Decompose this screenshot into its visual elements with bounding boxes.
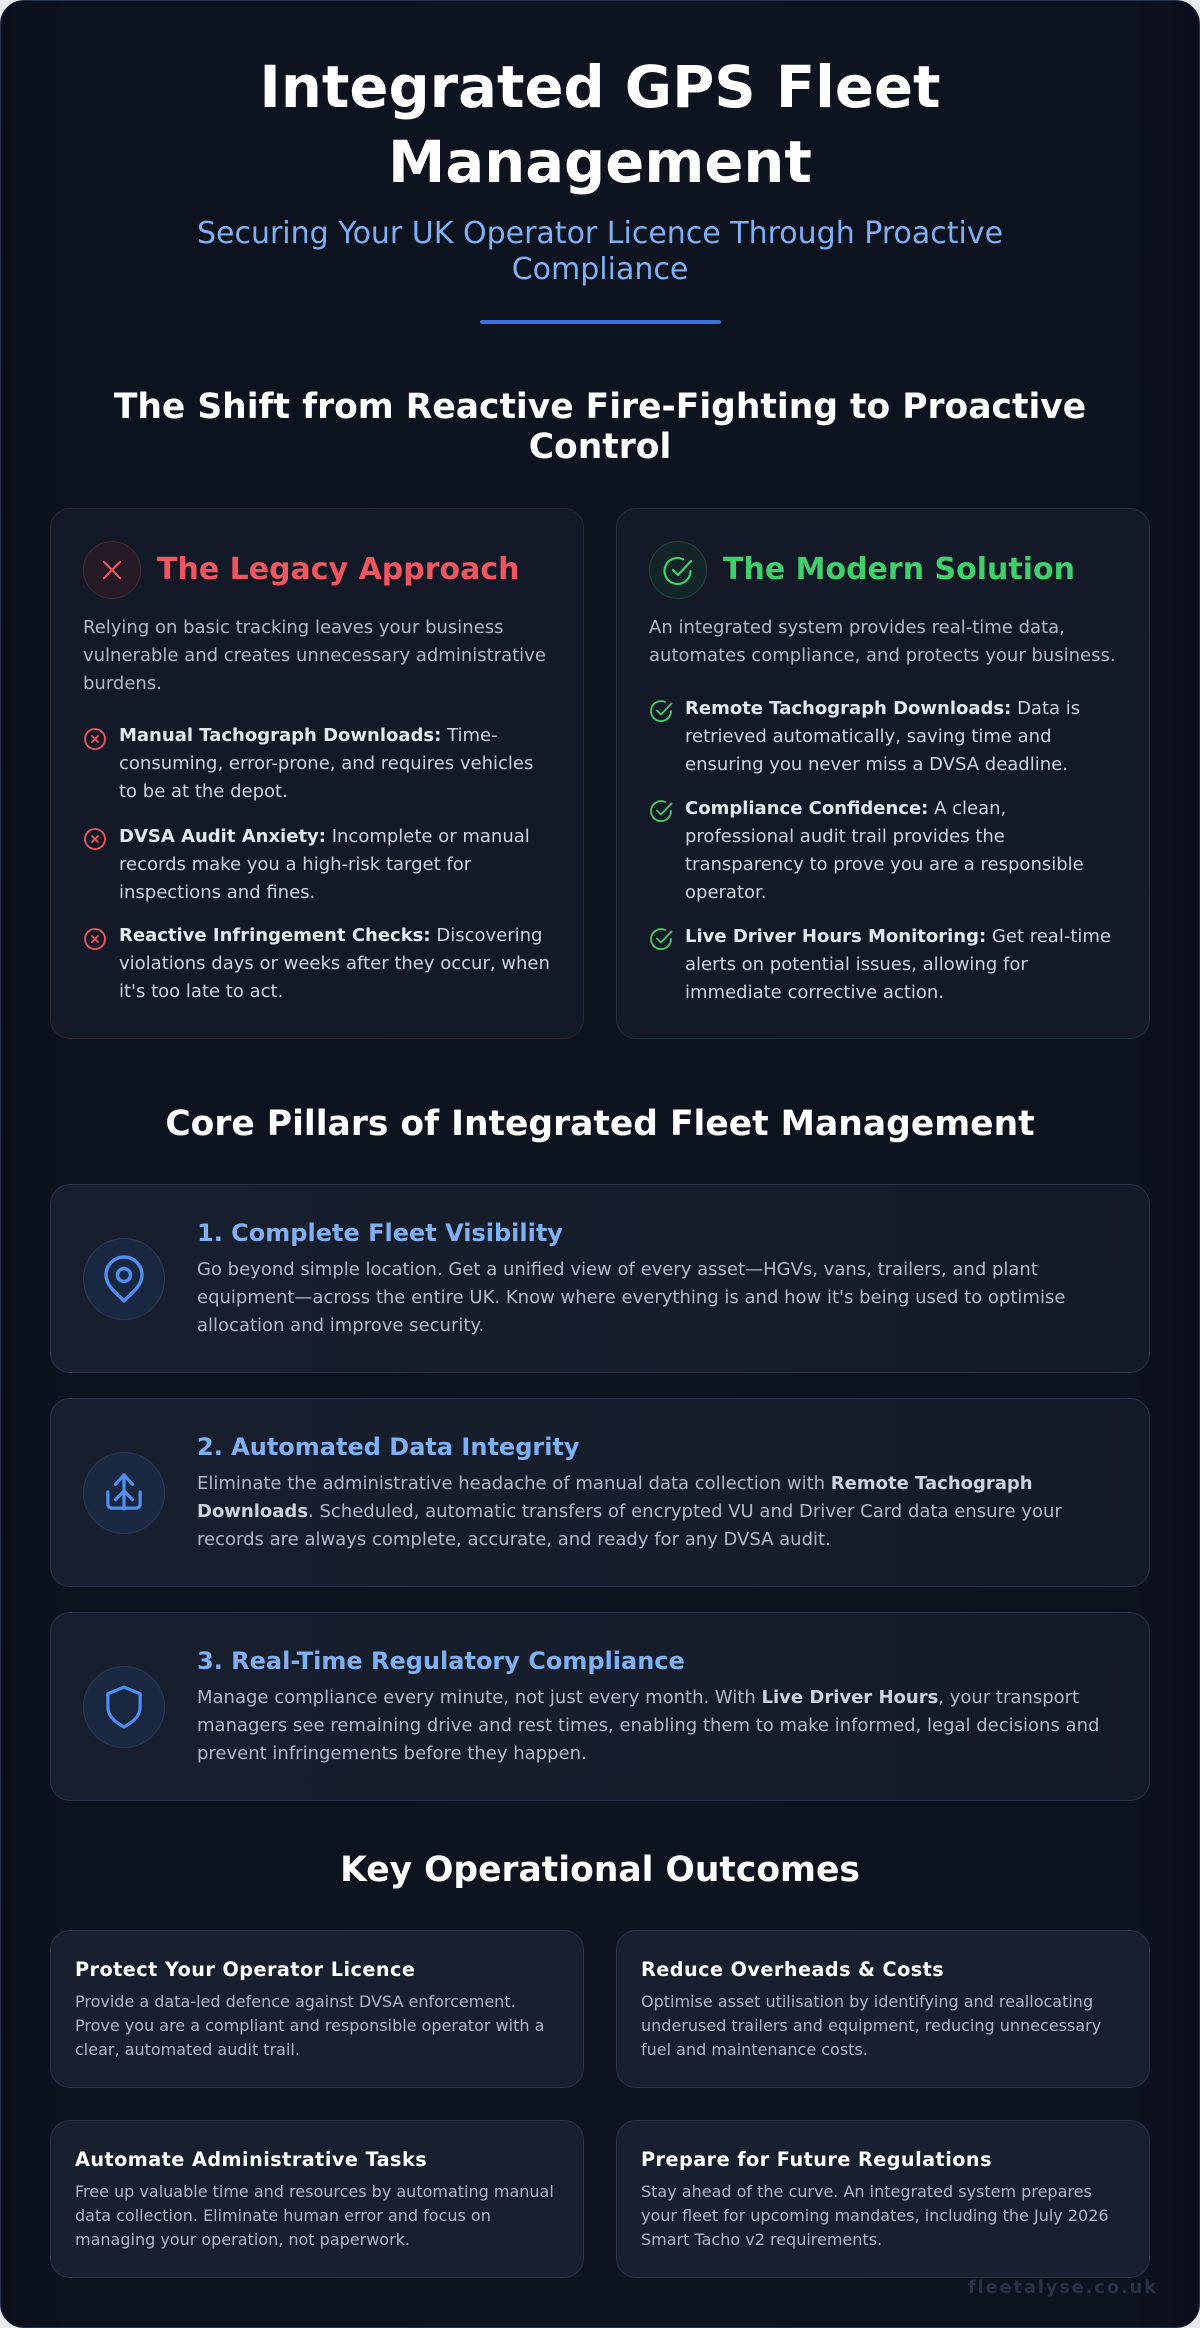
outcome 1 title: Protect Your Operator Licence bbox=[75, 1958, 415, 1981]
modern item 1 text: retrieved automatically, saving time and bbox=[685, 726, 1052, 747]
panel: outcome 4 bbox=[616, 2120, 1150, 2278]
outcome 3 text: data collection. Eliminate human error and focus on bbox=[75, 2206, 491, 2225]
panel: pillar 1 bbox=[50, 1184, 1150, 1373]
icon: upload bbox=[83, 1452, 165, 1534]
legacy item 2 text: inspections and fines. bbox=[119, 882, 315, 903]
heading: core pillars: Core Pillars of Integrated Fleet Management bbox=[165, 1104, 1035, 1144]
modern item 3 text bbox=[685, 926, 1111, 1003]
outcome 2 text bbox=[641, 1992, 1101, 2059]
modern item 3 text: Live Driver Hours Monitoring: Get real-time bbox=[685, 926, 1111, 947]
header divider bbox=[480, 320, 721, 324]
icon: legacy item 3 bbox=[84, 928, 106, 950]
icon: shield bbox=[83, 1666, 165, 1748]
icon: modern item 2 bbox=[650, 800, 672, 822]
outcome 2 title: Reduce Overheads & Costs bbox=[641, 1958, 944, 1981]
outcome 3 text: managing your operation, not paperwork. bbox=[75, 2230, 410, 2249]
outcome 1 text bbox=[75, 1992, 544, 2059]
title: Management bbox=[388, 128, 812, 196]
legacy intro bbox=[83, 617, 546, 694]
modern intro bbox=[649, 617, 1116, 666]
pillar 2 text: Eliminate the administrative headache of manual data collection with Remote Tachograph bbox=[197, 1473, 1033, 1494]
legacy intro: Relying on basic tracking leaves your business bbox=[83, 617, 504, 638]
pillar 3 text: managers see remaining drive and rest times, enabling them to make informed, legal decisions and bbox=[197, 1715, 1099, 1736]
panel: outcome 3 bbox=[50, 2120, 584, 2278]
outcome 3 text bbox=[75, 2182, 554, 2249]
subtitle: Securing Your UK Operator Licence Through Proactive bbox=[197, 216, 1003, 251]
icon: location pin bbox=[83, 1238, 165, 1320]
pillar 1 text: Go beyond simple location. Get a unified view of every asset—HGVs, vans, trailers, and plant bbox=[197, 1259, 1038, 1280]
outcome 4 text: Smart Tacho v2 requirements. bbox=[641, 2230, 882, 2249]
icon: modern check bbox=[649, 541, 707, 599]
pillar 3 title: 3. Real-Time Regulatory Compliance bbox=[197, 1647, 685, 1675]
legacy item 1 text bbox=[119, 725, 533, 802]
legacy item 2 text: DVSA Audit Anxiety: Incomplete or manual bbox=[119, 826, 530, 847]
legacy item 1 text: Manual Tachograph Downloads: Time- bbox=[119, 725, 498, 746]
legacy item 1 text: consuming, error-prone, and requires vehicles bbox=[119, 753, 533, 774]
legacy item 3 text: it's too late to act. bbox=[119, 981, 283, 1002]
modern intro: An integrated system provides real-time data, bbox=[649, 617, 1065, 638]
modern item 2 text: transparency to prove you are a responsible bbox=[685, 854, 1084, 875]
icon: legacy item 2 bbox=[84, 828, 106, 850]
pillar 3 text: prevent infringements before they happen. bbox=[197, 1743, 587, 1764]
icon: legacy item 1 bbox=[84, 728, 106, 750]
outcome 4 text bbox=[641, 2182, 1109, 2249]
legacy intro: burdens. bbox=[83, 673, 162, 694]
legacy item 2 text bbox=[119, 826, 530, 903]
subtitle: Compliance bbox=[512, 252, 688, 287]
pillar 2 text bbox=[197, 1473, 1062, 1550]
modern item 3 text: immediate corrective action. bbox=[685, 982, 944, 1003]
modern item 2 text: operator. bbox=[685, 882, 766, 903]
pillar 2 text: Downloads. Scheduled, automatic transfers of encrypted VU and Driver Card data ensure your bbox=[197, 1501, 1062, 1522]
legacy item 3 text bbox=[119, 925, 550, 1002]
panel: legacy approach bbox=[50, 508, 584, 1039]
icon: legacy cross bbox=[83, 541, 141, 599]
outcome 1 text: clear, automated audit trail. bbox=[75, 2040, 300, 2059]
panel: pillar 3 bbox=[50, 1612, 1150, 1801]
pillar 1 title: 1. Complete Fleet Visibility bbox=[197, 1219, 563, 1247]
legacy item 3 text: violations days or weeks after they occur, when bbox=[119, 953, 550, 974]
legacy intro: vulnerable and creates unnecessary administrative bbox=[83, 645, 546, 666]
modern intro: automates compliance, and protects your business. bbox=[649, 645, 1116, 666]
subtitle bbox=[197, 216, 1003, 287]
pillar 3 text bbox=[197, 1687, 1099, 1764]
title: Integrated GPS Fleet bbox=[259, 54, 941, 120]
pillar 2 title: 2. Automated Data Integrity bbox=[197, 1433, 580, 1461]
modern heading: The Modern Solution bbox=[723, 552, 1075, 587]
panel: outcome 2 bbox=[616, 1930, 1150, 2088]
legacy item 2 text: records make you a high-risk target for bbox=[119, 854, 471, 875]
icon: modern item 3 bbox=[650, 928, 672, 950]
panel: modern solution bbox=[616, 508, 1150, 1039]
modern item 1 text: ensuring you never miss a DVSA deadline. bbox=[685, 754, 1068, 775]
panel: outcome 1 bbox=[50, 1930, 584, 2088]
modern item 3 text: alerts on potential issues, allowing for bbox=[685, 954, 1028, 975]
outcome 4 title: Prepare for Future Regulations bbox=[641, 2148, 992, 2171]
pillar 1 text bbox=[197, 1259, 1065, 1336]
outcome 3 title: Automate Administrative Tasks bbox=[75, 2148, 427, 2171]
outcome 2 text: Optimise asset utilisation by identifying and reallocating bbox=[641, 1992, 1093, 2011]
watermark: fleetalyse.co.uk bbox=[968, 2278, 1158, 2298]
outcome 1 text: Provide a data-led defence against DVSA enforcement. bbox=[75, 1992, 516, 2011]
legacy item 1 text: to be at the depot. bbox=[119, 781, 288, 802]
outcome 4 text: Stay ahead of the curve. An integrated system prepares bbox=[641, 2182, 1092, 2201]
pillar 2 text: records are always complete, accurate, and ready for any DVSA audit. bbox=[197, 1529, 831, 1550]
modern item 2 text: professional audit trail provides the bbox=[685, 826, 1005, 847]
legacy item 3 text: Reactive Infringement Checks: Discovering bbox=[119, 925, 542, 946]
outcome 4 text: your fleet for upcoming mandates, including the July 2026 bbox=[641, 2206, 1109, 2225]
modern item 1 text bbox=[685, 698, 1080, 775]
legacy heading: The Legacy Approach bbox=[157, 552, 520, 587]
heading: the shift bbox=[114, 387, 1086, 467]
pillar 1 text: allocation and improve security. bbox=[197, 1315, 484, 1336]
pillar 1 text: equipment—across the entire UK. Know where everything is and how it's being used to optimise bbox=[197, 1287, 1065, 1308]
modern item 2 text bbox=[685, 798, 1084, 903]
modern item 1 text: Remote Tachograph Downloads: Data is bbox=[685, 698, 1080, 719]
heading: the shift: The Shift from Reactive Fire-Fighting to Proactive bbox=[114, 387, 1086, 427]
panel: pillar 2 bbox=[50, 1398, 1150, 1587]
heading: key outcomes: Key Operational Outcomes bbox=[340, 1850, 860, 1890]
icon: modern item 1 bbox=[650, 700, 672, 722]
title bbox=[259, 54, 941, 196]
outcome 2 text: fuel and maintenance costs. bbox=[641, 2040, 868, 2059]
heading: the shift: Control bbox=[529, 427, 671, 467]
pillar 3 text: Manage compliance every minute, not just every month. With Live Driver Hours, your transport bbox=[197, 1687, 1079, 1708]
outcome 1 text: Prove you are a compliant and responsible operator with a bbox=[75, 2016, 544, 2035]
outcome 2 text: underused trailers and equipment, reducing unnecessary bbox=[641, 2016, 1101, 2035]
modern item 2 text: Compliance Confidence: A clean, bbox=[685, 798, 1006, 819]
outcome 3 text: Free up valuable time and resources by automating manual bbox=[75, 2182, 554, 2201]
